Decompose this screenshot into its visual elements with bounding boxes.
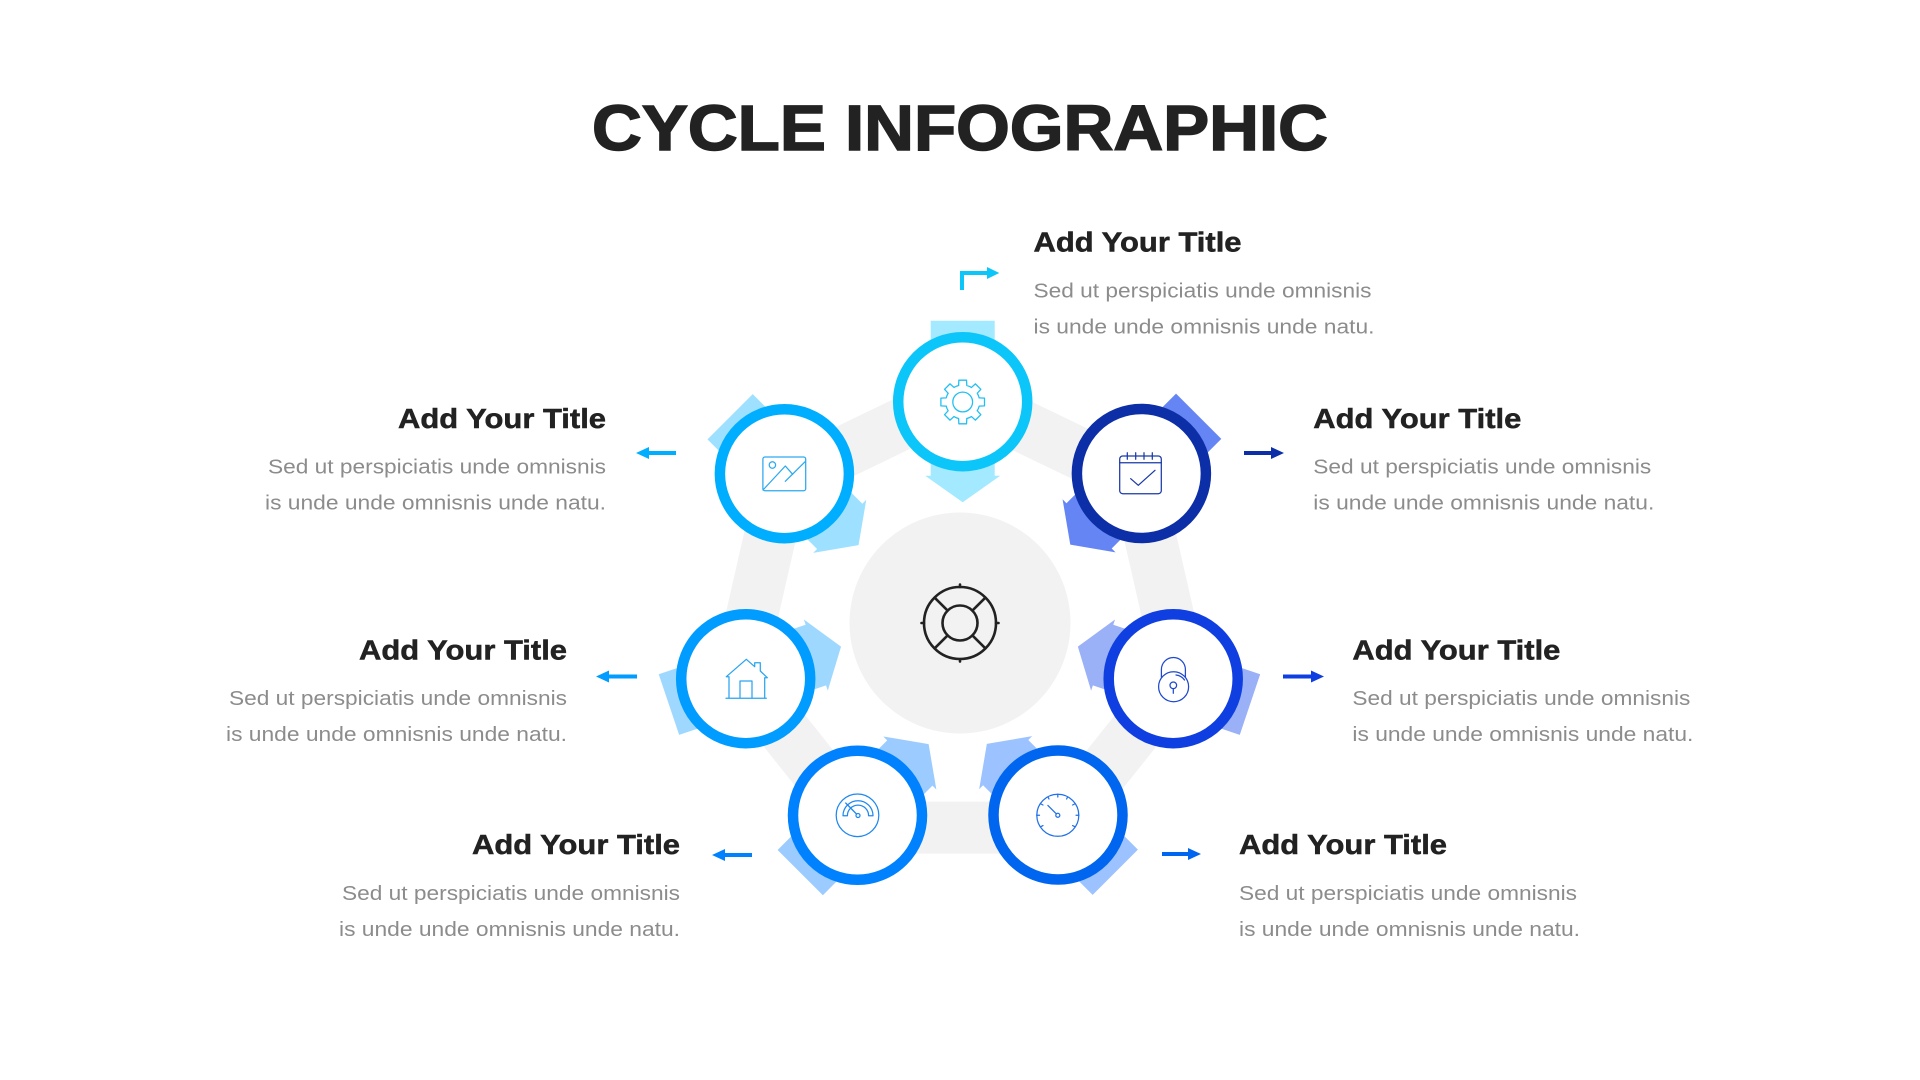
arrow: step 3 — [1066, 611, 1262, 740]
arrow: step 7 pointer — [636, 447, 676, 459]
text: step 4: is unde unde omnisnis unde natu. — [1239, 919, 1580, 941]
arrow: step 4 pointer — [1162, 848, 1201, 860]
icon: gauge — [836, 794, 879, 837]
label: step 5 — [339, 829, 752, 941]
ring: step 1 — [898, 337, 1027, 466]
ring: step 5 — [793, 751, 922, 880]
ring: step 4 — [994, 750, 1122, 880]
text: step 2: is unde unde omnisnis unde natu. — [1313, 493, 1654, 515]
label: step 3 — [1283, 634, 1693, 746]
arrow: step 2 pointer — [1244, 447, 1284, 459]
heading: step 4: Add Your Title — [1239, 829, 1447, 860]
ring: step 2 — [1077, 409, 1206, 538]
label: step 4 — [1162, 829, 1580, 941]
text: step 3: is unde unde omnisnis unde natu. — [1352, 724, 1693, 746]
arrow: step 5 — [774, 718, 955, 899]
label: step 6 — [226, 634, 637, 746]
icon: calendar — [1120, 453, 1161, 494]
heading: step 5: Add Your Title — [472, 829, 680, 860]
icon: padlock — [1159, 658, 1189, 702]
label: step 7 — [265, 403, 676, 515]
icon: lifebuoy — [922, 584, 998, 662]
text: step 5: is unde unde omnisnis unde natu. — [339, 919, 680, 941]
heading: step 2: Add Your Title — [1313, 403, 1521, 434]
arrow: step 1 pointer — [960, 267, 999, 290]
text: step 5: Sed ut perspiciatis unde omnisnis — [342, 883, 680, 905]
step 5: gauge node — [774, 718, 955, 899]
step 3: lock node — [1066, 611, 1262, 743]
text: step 2: Sed ut perspiciatis unde omnisnis — [1313, 457, 1651, 479]
icon: dial — [1037, 794, 1079, 836]
arrow: step 7 — [704, 390, 885, 572]
center disc — [850, 512, 1070, 734]
heading: step 7: Add Your Title — [398, 403, 606, 434]
arrow: step 4 — [960, 717, 1142, 899]
step 4: dial node — [960, 717, 1142, 899]
ring: step 3 — [1109, 614, 1238, 743]
text: step 4: Sed ut perspiciatis unde omnisnis — [1239, 883, 1577, 905]
text: step 3: Sed ut perspiciatis unde omnisnis — [1352, 688, 1690, 710]
heading: step 1: Add Your Title — [1034, 227, 1242, 258]
arrow: step 2 — [1044, 390, 1225, 571]
heading: step 3: Add Your Title — [1352, 634, 1560, 666]
step 1: gear node — [898, 321, 1027, 502]
title: CYCLE INFOGRAPHIC — [592, 92, 1328, 164]
step 7: image node — [704, 390, 885, 572]
arrow: step 3 pointer — [1283, 670, 1324, 682]
text: step 1: Sed ut perspiciatis unde omnisnis — [1034, 280, 1372, 302]
icon: picture — [763, 457, 806, 491]
label: step 1 — [960, 227, 1374, 338]
grey heptagon cycle ring — [739, 396, 1181, 828]
arrow: step 6 — [657, 611, 853, 740]
heading: step 6: Add Your Title — [359, 634, 567, 666]
icon: house — [726, 659, 767, 698]
text: step 7: is unde unde omnisnis unde natu. — [265, 493, 606, 515]
label: step 2 — [1244, 403, 1654, 515]
icon: gear — [941, 380, 985, 424]
text: step 1: is unde unde omnisnis unde natu. — [1034, 316, 1374, 338]
ring: step 7 — [720, 409, 849, 538]
step 2: calendar node — [1044, 390, 1225, 571]
step 6: house node — [657, 611, 853, 743]
arrow: step 1 — [925, 321, 1000, 502]
ring: step 6 — [681, 614, 810, 743]
arrow: step 6 pointer — [596, 670, 637, 682]
text: step 6: Sed ut perspiciatis unde omnisnis — [229, 688, 567, 710]
arrow: step 5 pointer — [712, 849, 752, 861]
text: step 6: is unde unde omnisnis unde natu. — [226, 724, 567, 746]
text: step 7: Sed ut perspiciatis unde omnisnis — [268, 457, 606, 479]
